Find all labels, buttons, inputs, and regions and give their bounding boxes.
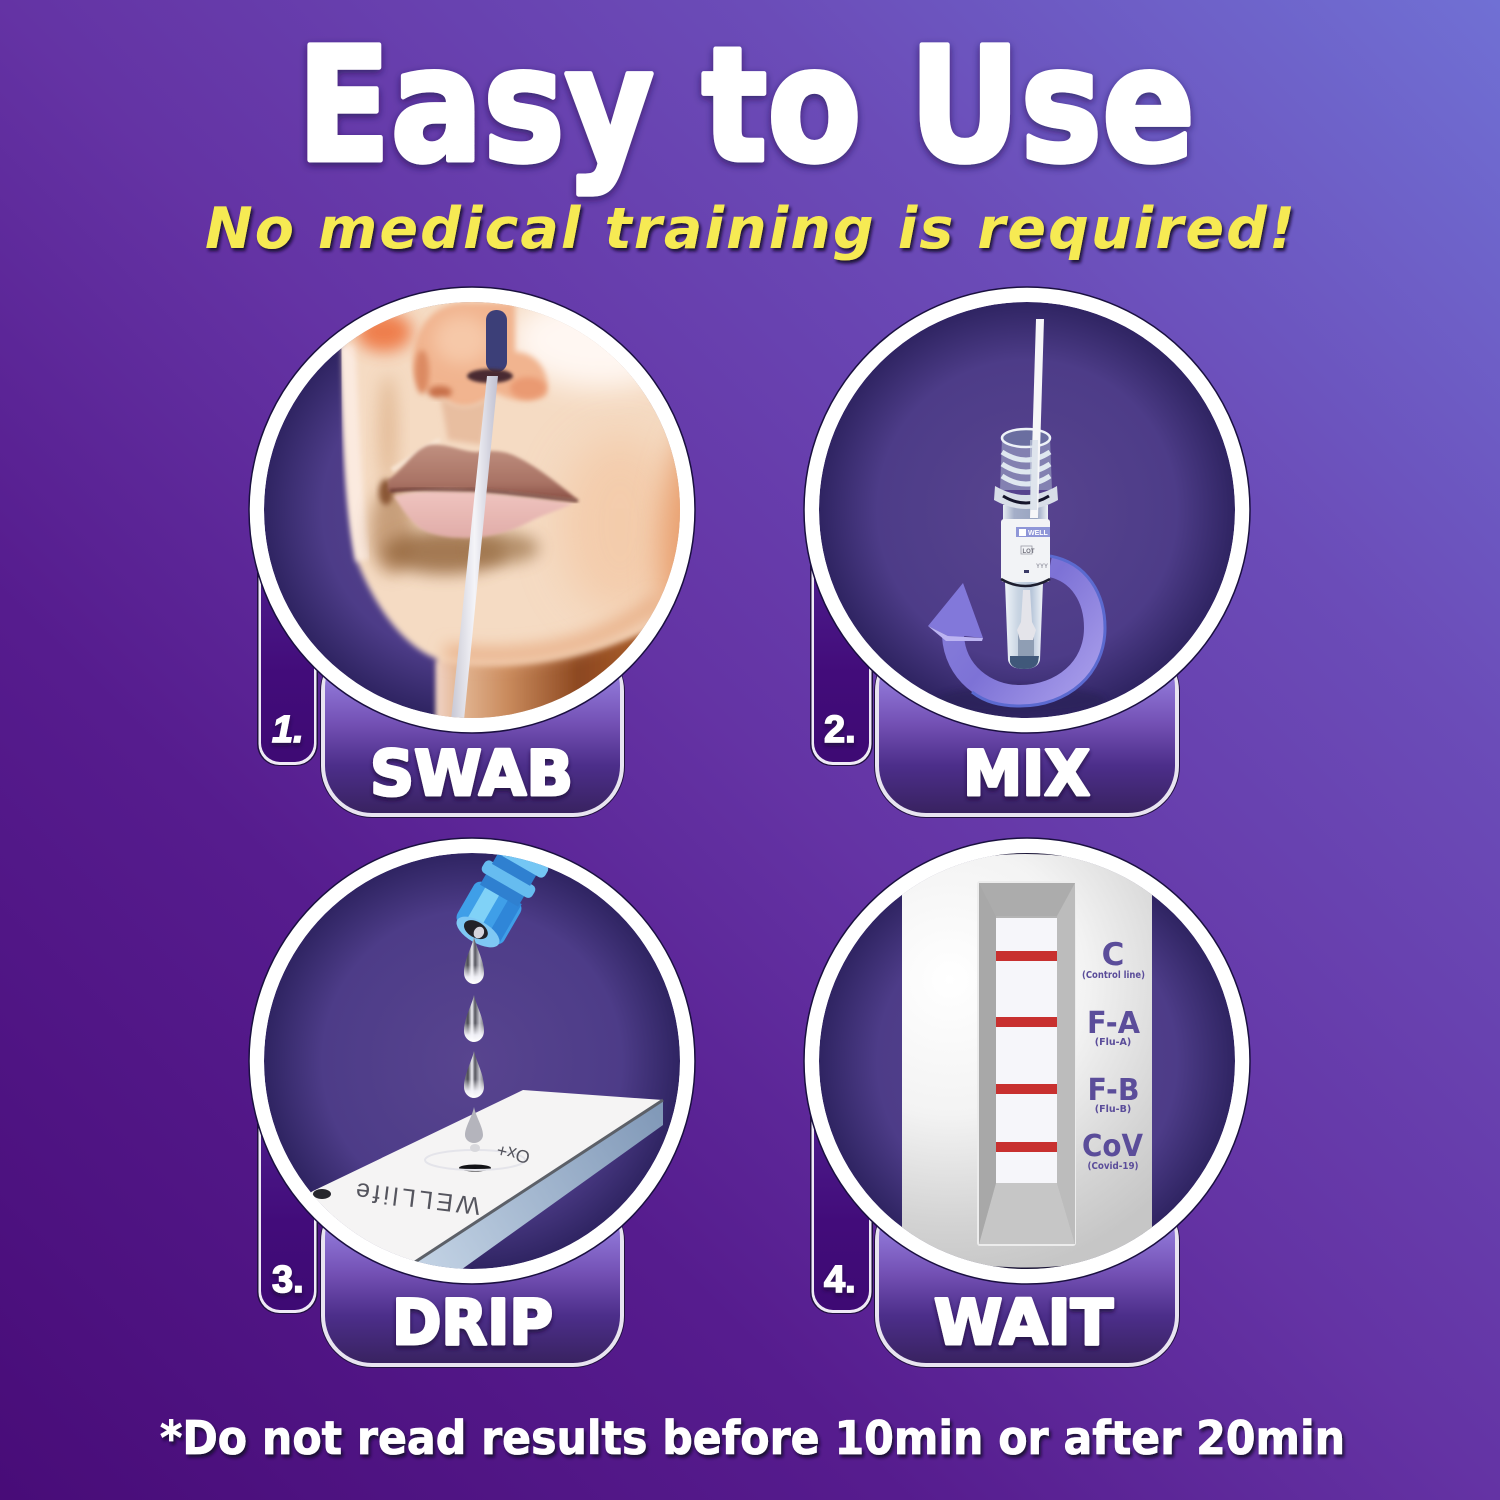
line legend: F-A bbox=[1087, 1006, 1141, 1041]
test tube: LOT bbox=[1022, 549, 1035, 555]
line legend: C bbox=[1102, 937, 1124, 973]
label panel: drip bbox=[320, 1190, 625, 1368]
lips bbox=[388, 445, 578, 500]
test tube: YYY bbox=[1036, 564, 1048, 570]
number tab 1: 1. bbox=[272, 709, 304, 751]
test tube bbox=[994, 319, 1058, 669]
nose bbox=[413, 303, 547, 407]
test cassette: WELLlife bbox=[354, 1177, 482, 1220]
number tab 4 bbox=[810, 1090, 873, 1314]
label panel: mix: MIX bbox=[963, 737, 1090, 810]
step 4: wait bbox=[804, 838, 1250, 1368]
number tab 2 bbox=[810, 540, 873, 766]
line legend: (Flu-A) bbox=[1095, 1037, 1131, 1048]
number tab 1 bbox=[257, 540, 318, 766]
step 2: mix bbox=[804, 287, 1250, 818]
number tab 3: 3. bbox=[272, 1259, 304, 1301]
line legend: (Flu-B) bbox=[1095, 1104, 1131, 1115]
label panel: swab bbox=[320, 640, 625, 818]
line legend: (Control line) bbox=[1082, 970, 1145, 981]
footnote: *Do not read results before 10min or after 20min bbox=[160, 1411, 1345, 1465]
rotation arrow bbox=[928, 556, 1105, 706]
circle frame 3 bbox=[249, 838, 695, 1284]
illustration: swab in nose bbox=[264, 302, 680, 718]
number tab 3 bbox=[257, 1090, 318, 1314]
illustration: drops on test cassette bbox=[264, 853, 680, 1269]
blue nozzle bbox=[456, 854, 548, 948]
test cassette: Ox+ bbox=[495, 1140, 532, 1168]
label panel: drip: DRIP bbox=[392, 1286, 553, 1359]
label panel: mix bbox=[874, 640, 1180, 818]
illustration: test cassette result window bbox=[819, 845, 1235, 1280]
line legend: (Covid-19) bbox=[1088, 1161, 1138, 1172]
label panel: wait bbox=[874, 1190, 1180, 1368]
circle frame 2 bbox=[804, 287, 1250, 733]
test tube: WELL bbox=[1028, 530, 1049, 537]
title: Easy to Use bbox=[297, 14, 1195, 198]
line legend: F-B bbox=[1088, 1073, 1140, 1108]
water drops bbox=[464, 937, 484, 1152]
line legend: CoV bbox=[1082, 1129, 1144, 1164]
circle frame 4 bbox=[804, 838, 1250, 1284]
subtitle: No medical training is required! bbox=[205, 196, 1295, 262]
line legend bbox=[1082, 937, 1145, 1172]
number tab 4: 4. bbox=[824, 1259, 856, 1301]
label panel: wait: WAIT bbox=[934, 1286, 1113, 1359]
step 1: swab bbox=[248, 286, 696, 818]
number tab 2: 2. bbox=[824, 709, 856, 751]
step 3: drip bbox=[249, 809, 695, 1368]
test cassette bbox=[310, 1090, 664, 1269]
result window frame bbox=[977, 881, 1076, 1246]
circle frame 1 bbox=[249, 287, 695, 733]
label panel: swab: SWAB bbox=[370, 737, 573, 810]
illustration: tube with rotation arrow bbox=[819, 302, 1235, 718]
